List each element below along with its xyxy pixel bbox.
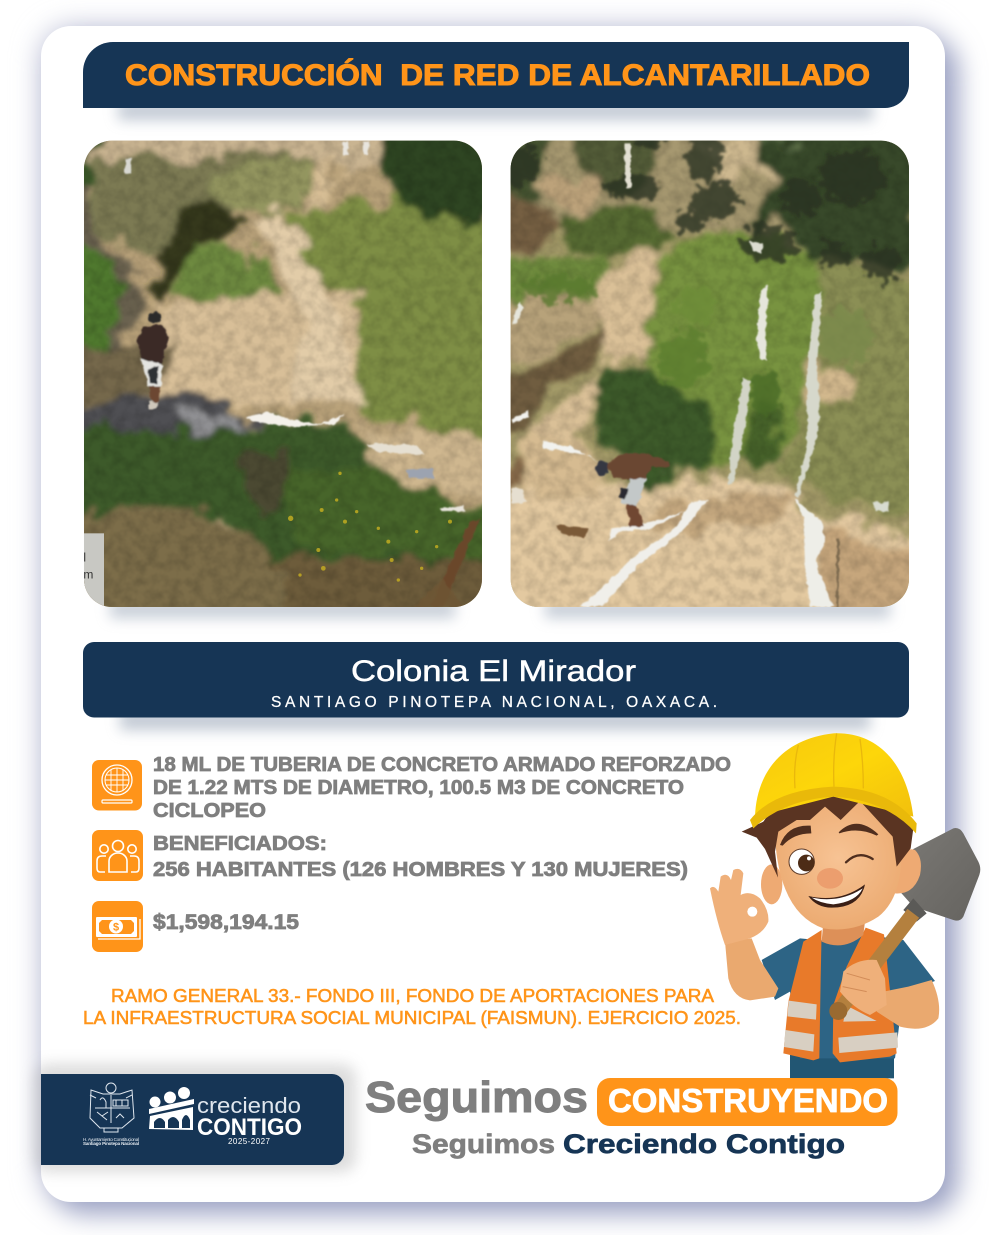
person (137, 312, 169, 409)
tree canopy foliage (500, 127, 900, 417)
creciendo contigo logo (149, 1087, 302, 1146)
funding note: RAMO GENERAL 33.- FONDO III, FONDO DE APORTACIONES PARA (111, 985, 715, 1006)
raised arm with OK hand (710, 869, 778, 1000)
logo banner shadow (34, 1064, 356, 1172)
photo noise texture (511, 141, 909, 607)
worker character mascot (710, 733, 980, 1078)
eye wink (846, 855, 873, 862)
creciendo contigo logo: 2025-2027 (228, 1137, 271, 1146)
map attribution box: m (83, 567, 93, 581)
location banner shadow (120, 710, 870, 730)
shovel blade (900, 828, 980, 921)
title text: CONSTRUCCIÓN DE RED DE ALCANTARILLADO (125, 58, 870, 92)
head (775, 800, 902, 929)
orange pill (597, 1078, 898, 1126)
tagline: Creciendo Contigo (563, 1129, 845, 1159)
gripping arm and hand (840, 960, 939, 1029)
crouching worker (595, 453, 670, 527)
logo banner: Santiago Pinotepa Nacional (83, 1141, 139, 1146)
pill word: CONSTRUYENDO (608, 1082, 888, 1119)
photo noise texture (84, 141, 482, 607)
eyebrows (780, 824, 878, 846)
funding note: LA INFRAESTRUCTURA SOCIAL MUNICIPAL (FAISMUN). EJERCICIO 2025. (83, 1007, 741, 1028)
map attribution box (83, 533, 104, 607)
amount: $1,598,194.15 (153, 911, 299, 934)
nose (817, 868, 843, 889)
shovel handle (829, 898, 927, 1020)
shirt (762, 935, 935, 1058)
location subtitle: SANTIAGO PINOTEPA NACIONAL, OAXACA. (271, 694, 717, 711)
pipe description: DE 1.22 MTS DE DIAMETRO, 100.5 M3 DE CONCRETO (153, 777, 684, 799)
icon: money (92, 901, 143, 952)
pipe description: 18 ML DE TUBERIA DE CONCRETO ARMADO REFORZADO (153, 754, 731, 776)
hair (742, 793, 913, 878)
mouth (808, 884, 865, 908)
icon: pipe (92, 760, 142, 810)
beneficiaries text: 256 HABITANTES (126 HOMBRES Y 130 MUJERES) (153, 859, 688, 881)
vest (783, 928, 898, 1062)
pipe description (153, 754, 731, 822)
tagline: Seguimos (412, 1129, 555, 1159)
location banner (83, 642, 909, 718)
logo banner (41, 1074, 344, 1165)
creciendo contigo logo: CONTIGO (197, 1114, 302, 1141)
ears (761, 849, 921, 904)
location name: Colonia El Mirador (351, 655, 636, 688)
tagline (412, 1129, 845, 1159)
creciendo contigo logo: creciendo (197, 1093, 301, 1118)
neck (822, 922, 865, 945)
icon: people (92, 830, 143, 881)
trousers (790, 1055, 894, 1078)
beneficiaries text (153, 833, 688, 881)
beneficiaries text: BENEFICIADOS: (153, 833, 327, 855)
photo 2: trench with worker (510, 140, 909, 607)
municipal crest (90, 1083, 134, 1132)
council name: H. Ayuntamiento Constitucional (83, 1137, 139, 1142)
funding note (83, 985, 741, 1028)
pipe description: CICLOPEO (153, 800, 266, 822)
photo 1: site with person (84, 140, 482, 607)
photo shadows (110, 600, 890, 618)
icon: money: $ (113, 922, 119, 934)
slogan (365, 1073, 898, 1126)
title banner (83, 42, 909, 108)
eye open (789, 849, 815, 874)
helmet (750, 733, 917, 833)
slogan: Seguimos (365, 1073, 588, 1122)
map attribution box: l (83, 551, 86, 565)
title banner shadow (118, 102, 873, 120)
